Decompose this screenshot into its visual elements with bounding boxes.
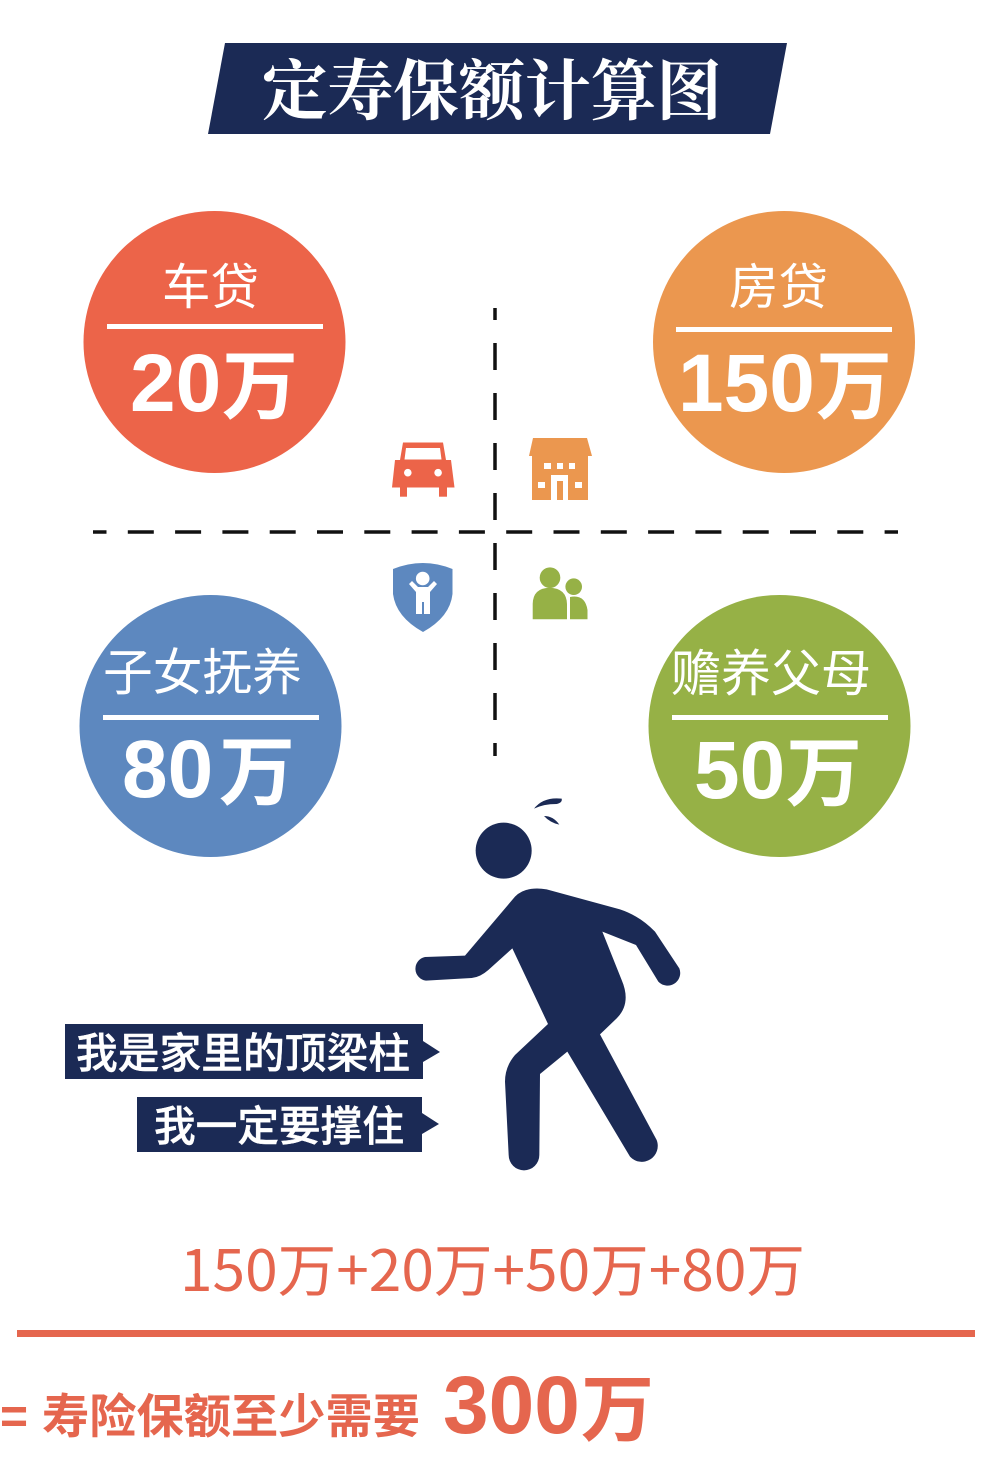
panel: car loan: 车贷 [162, 248, 259, 319]
panel: car loan [84, 211, 346, 473]
panel: mortgage [653, 211, 915, 473]
panel: child support: 80 [122, 724, 213, 815]
callout: pillar of the family: 我是家里的顶梁柱 [76, 1020, 410, 1081]
panel: car loan: 20 [130, 338, 221, 429]
formula: 150万+20万+50万+80万 [180, 1226, 805, 1308]
panel: car loan: 万 [222, 325, 298, 435]
icon: car [392, 442, 454, 497]
icon: child shield [393, 563, 452, 632]
panel: elder care [648, 595, 910, 857]
result: total sum: 万 [581, 1351, 654, 1457]
panel: mortgage: 150 [678, 338, 815, 429]
panel: elder care: 50 [694, 725, 785, 816]
title banner: 定寿保额计算图 [262, 56, 722, 129]
icon: parents [533, 567, 588, 619]
result: total sum: 寿险保额至少需要 [42, 1378, 420, 1447]
panel: mortgage: 万 [816, 325, 892, 435]
panel: mortgage: 房贷 [729, 248, 828, 319]
result: total sum: 300 [443, 1360, 580, 1451]
icon: house [529, 438, 592, 500]
panel: child support: 子女抚养 [103, 633, 302, 705]
icon: straining person [415, 798, 680, 1170]
panel: child support [80, 595, 342, 857]
title banner [208, 43, 787, 134]
result: total sum: = [0, 1388, 28, 1444]
panel: elder care: 赡养父母 [671, 634, 871, 706]
panel: elder care: 万 [786, 712, 862, 822]
callout: must hold on: 我一定要撑住 [154, 1093, 404, 1154]
divider line [17, 1330, 975, 1337]
panel: child support: 万 [219, 711, 295, 821]
result: total sum [0, 1351, 654, 1457]
